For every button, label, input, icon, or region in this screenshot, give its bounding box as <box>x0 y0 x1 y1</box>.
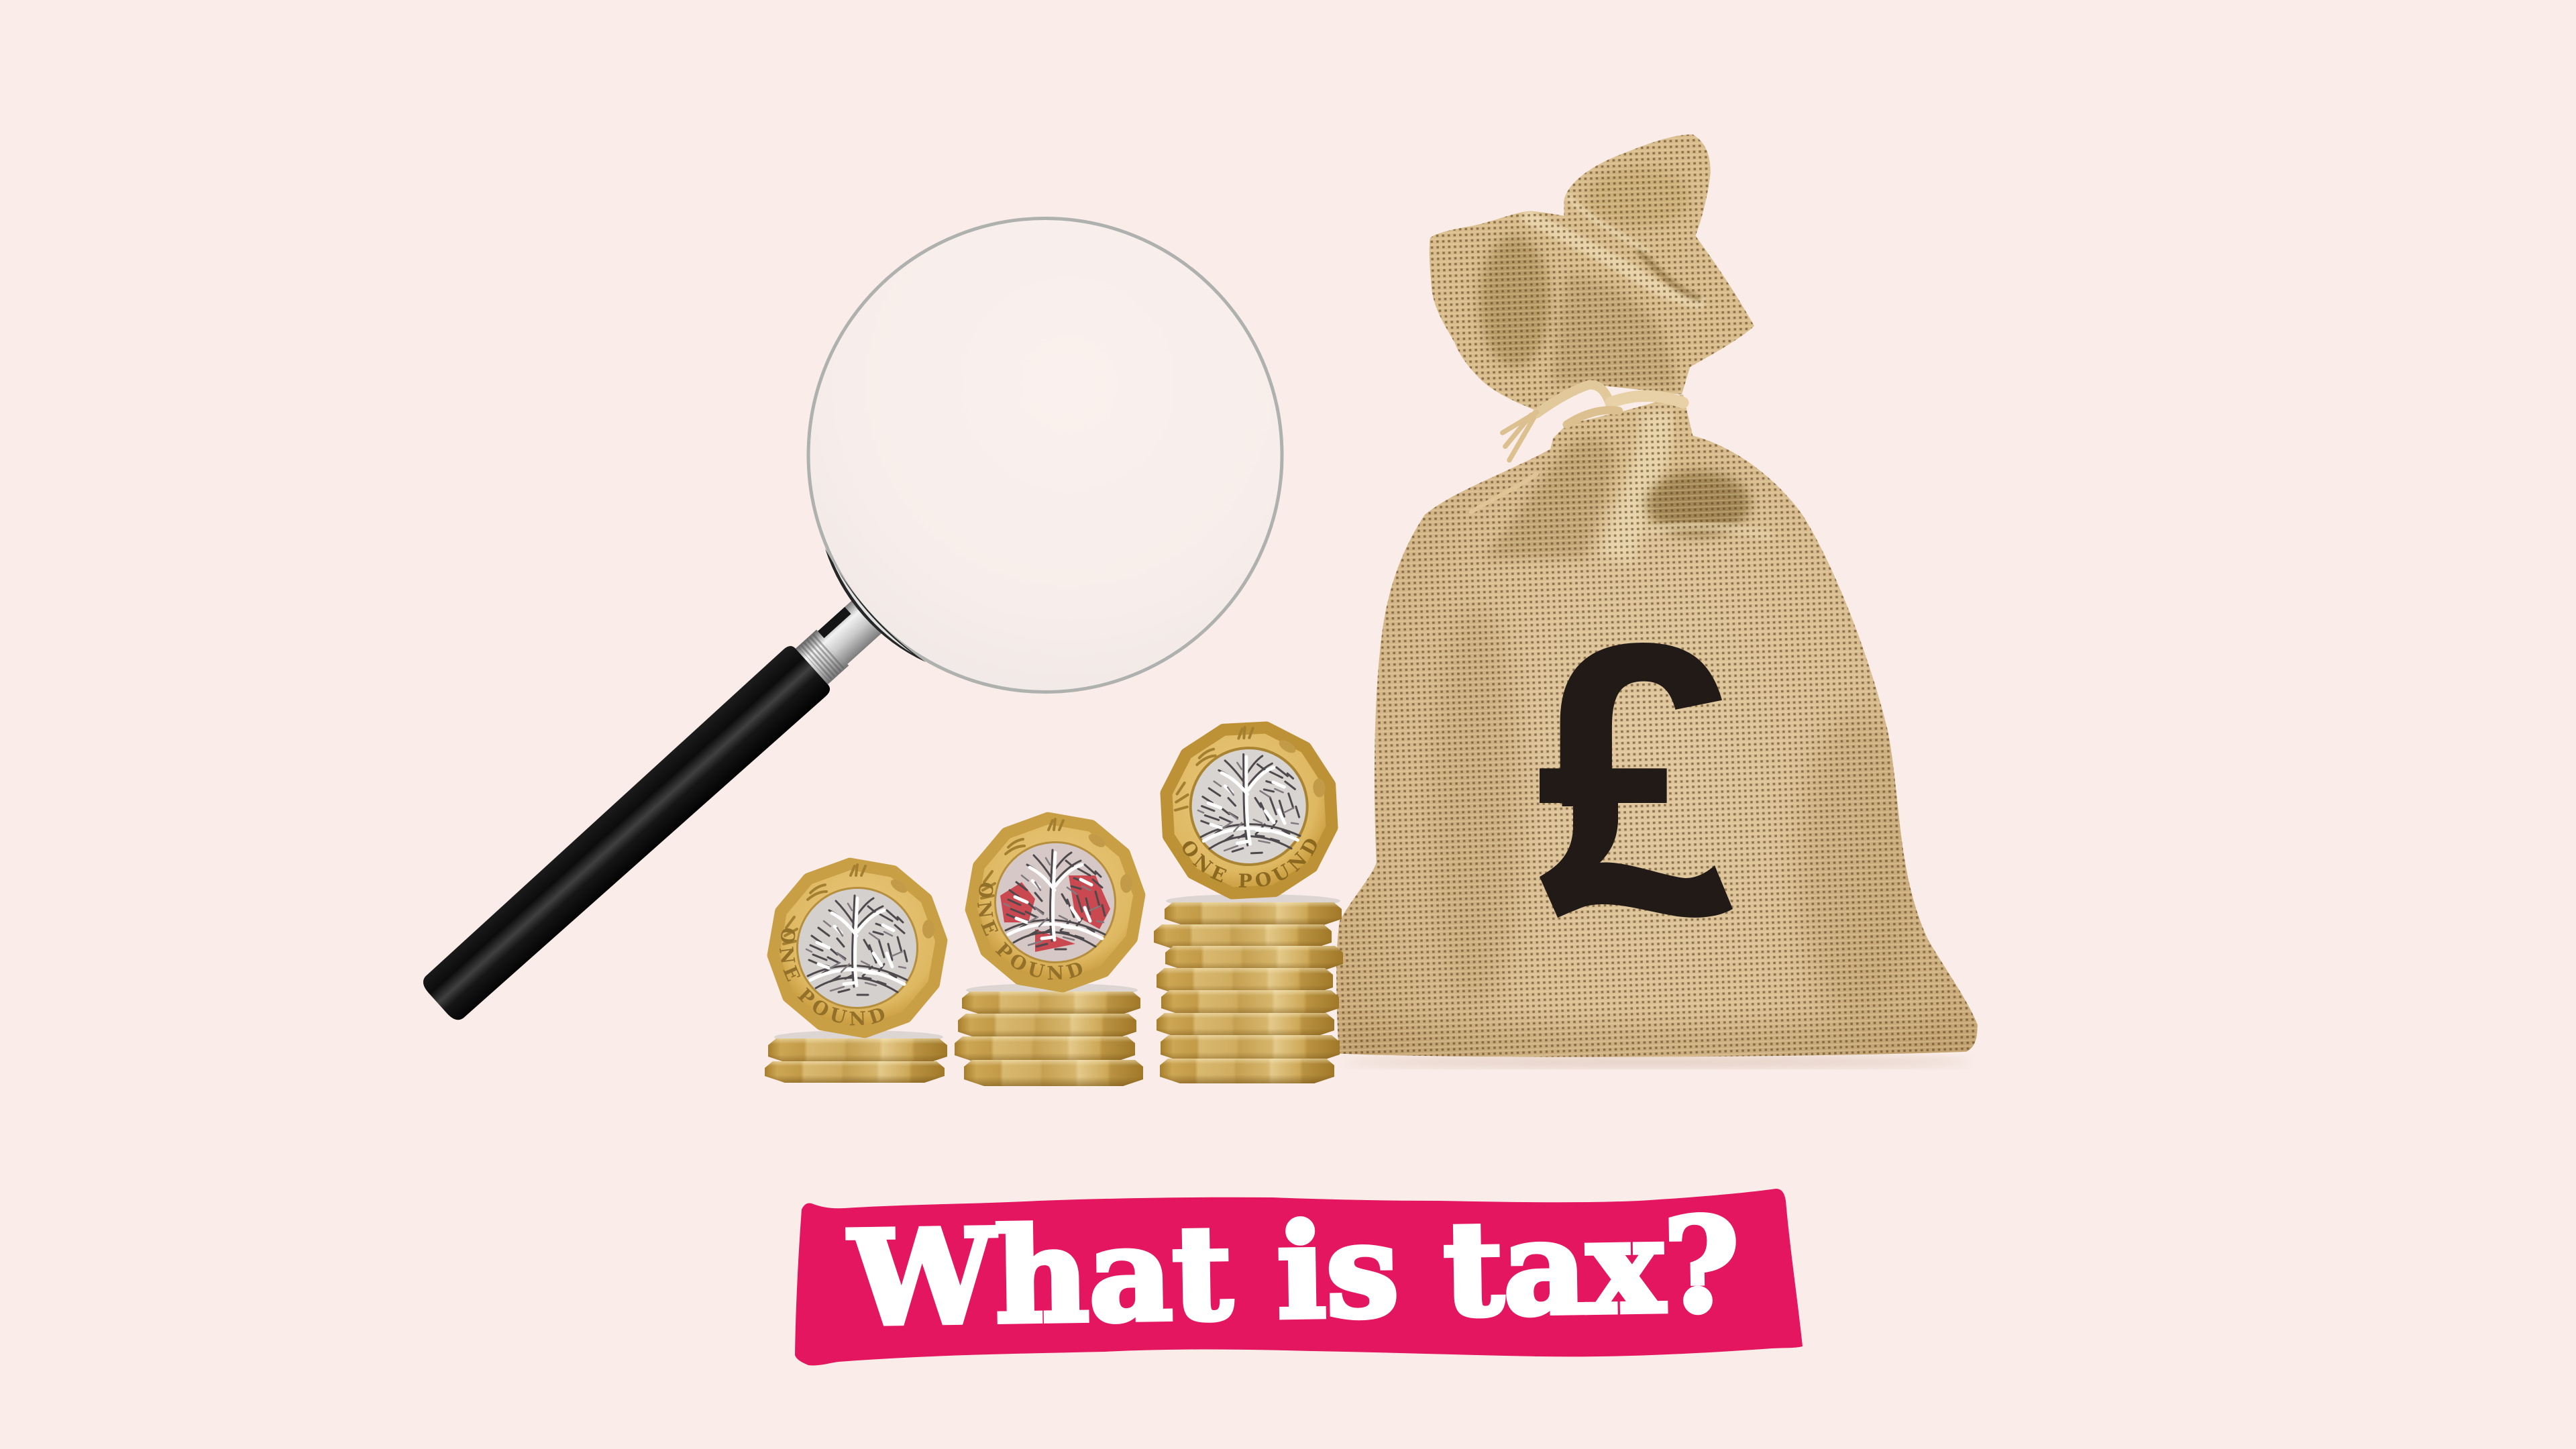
money bag <box>1328 127 1992 1067</box>
pound coin: ONE POUND <box>977 883 1083 979</box>
icon: pound sign printed on bag <box>1540 643 1733 918</box>
banner shape <box>795 1189 1803 1365</box>
pound coin <box>965 812 1146 993</box>
lens mount crescent <box>825 549 926 662</box>
bag burlap weave <box>1328 127 1986 1067</box>
magnifier handle and collar <box>417 588 894 1026</box>
coin stack: left <box>765 857 947 1083</box>
pound swoosh base <box>1540 802 1733 918</box>
bag neck and ears <box>1430 134 1754 504</box>
coin stack: middle <box>955 812 1146 1086</box>
magnifier lens <box>808 219 1282 692</box>
pound coin <box>767 857 947 1038</box>
pound coin <box>1161 722 1338 899</box>
icon: magnifying glass <box>417 219 1282 1026</box>
bag rope knot <box>1471 385 1683 512</box>
title text: What is tax? <box>847 1190 1741 1354</box>
stack discs <box>765 1030 947 1083</box>
title banner <box>795 1189 1803 1365</box>
bag ground shadow <box>1342 1057 1972 1067</box>
pound glyph: £ <box>1523 562 1741 1001</box>
stack discs <box>1154 894 1343 1083</box>
pound coin: ONE POUND <box>1183 839 1317 888</box>
stack discs <box>955 983 1143 1086</box>
bag shading <box>1335 167 1992 1067</box>
pound coin: ONE POUND <box>780 928 884 1025</box>
coin stack: right <box>1154 722 1343 1083</box>
bag body <box>1336 435 1978 1057</box>
